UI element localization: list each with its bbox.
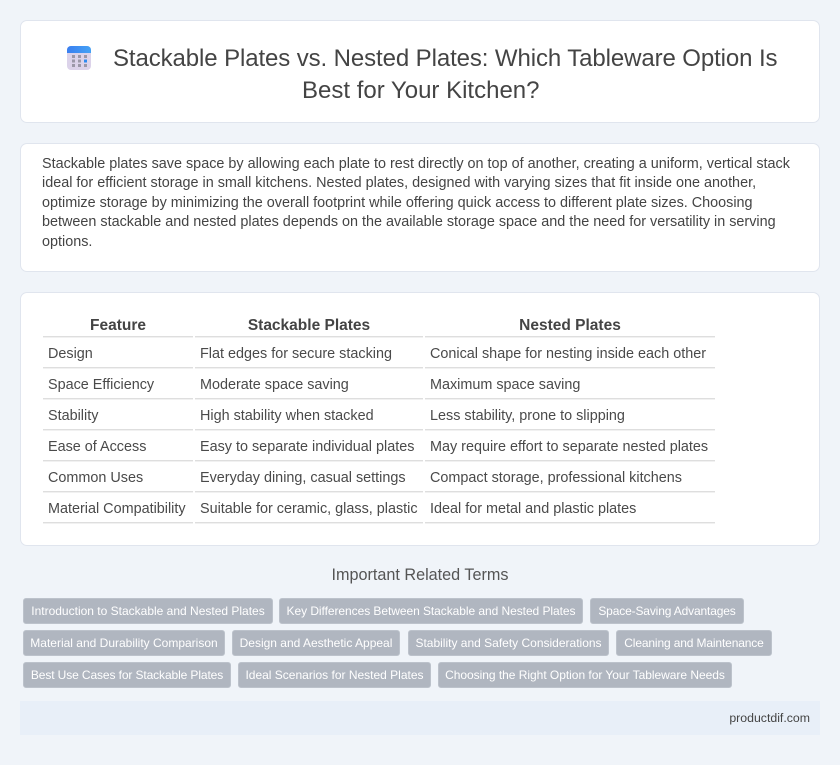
table content: Stability xyxy=(48,408,98,424)
table content: Space Efficiency xyxy=(48,377,154,393)
table content: Flat edges for secure stacking xyxy=(200,346,392,362)
intro text: options. xyxy=(42,234,92,250)
table content: Nested Plates xyxy=(519,317,621,334)
table content: Ease of Access xyxy=(48,439,146,455)
table content: Material Compatibility xyxy=(48,501,186,517)
title: Stackable Plates vs. Nested Plates: Which Tableware Option Is xyxy=(113,45,777,72)
title xyxy=(113,45,777,104)
intro text: Stackable plates save space by allowing each plate to rest directly on top of another, creating a uniform, vertical stack xyxy=(42,156,790,172)
table content: Maximum space saving xyxy=(430,377,580,393)
footer source text: productdif.com xyxy=(729,711,810,725)
table content: Moderate space saving xyxy=(200,377,349,393)
table content: Feature xyxy=(90,317,146,334)
footer bar xyxy=(20,701,820,735)
table content: Conical shape for nesting inside each other xyxy=(430,346,706,362)
table content: Suitable for ceramic, glass, plastic xyxy=(200,501,418,517)
table content: Compact storage, professional kitchens xyxy=(430,470,682,486)
panel: comparison table xyxy=(20,292,820,546)
related terms tags xyxy=(23,598,772,688)
table content: Common Uses xyxy=(48,470,143,486)
related terms tags: Best Use Cases for Stackable Plates xyxy=(31,668,223,682)
related terms tags: Choosing the Right Option for Your Tableware Needs xyxy=(445,668,725,682)
table content: Design xyxy=(48,346,93,362)
title: Best for Your Kitchen? xyxy=(302,77,540,104)
related terms tags: Space-Saving Advantages xyxy=(598,604,736,618)
table content: High stability when stacked xyxy=(200,408,374,424)
related terms tags: Key Differences Between Stackable and Nested Plates xyxy=(287,604,575,618)
panel: intro xyxy=(20,143,820,272)
intro text: between stackable and nested plates depends on the available storage space and the need for versatility in serving xyxy=(42,214,776,230)
heading: related terms: Important Related Terms xyxy=(332,566,508,584)
intro text xyxy=(42,156,790,250)
table content: Everyday dining, casual settings xyxy=(200,470,406,486)
related terms tags: Ideal Scenarios for Nested Plates xyxy=(245,668,424,682)
related terms tags: Cleaning and Maintenance xyxy=(624,636,764,650)
intro text: optimize storage by minimizing the overall footprint while offering quick access to different plate sizes. Choosing xyxy=(42,194,753,210)
related terms tags: Material and Durability Comparison xyxy=(30,636,218,650)
panel: header xyxy=(20,20,820,123)
table content: Stackable Plates xyxy=(248,317,370,334)
related terms tags: Introduction to Stackable and Nested Plates xyxy=(31,604,265,618)
table content: Ideal for metal and plastic plates xyxy=(430,501,636,517)
table content: Easy to separate individual plates xyxy=(200,439,414,455)
table content: May require effort to separate nested plates xyxy=(430,439,708,455)
intro text: ideal for efficient storage in small kitchens. Nested plates, designed with varying sizes that fit inside one another, xyxy=(42,175,756,191)
related terms tags: Design and Aesthetic Appeal xyxy=(240,636,392,650)
related terms tags: Stability and Safety Considerations xyxy=(415,636,602,650)
table content: Less stability, prone to slipping xyxy=(430,408,625,424)
icon: calendar xyxy=(67,46,91,70)
